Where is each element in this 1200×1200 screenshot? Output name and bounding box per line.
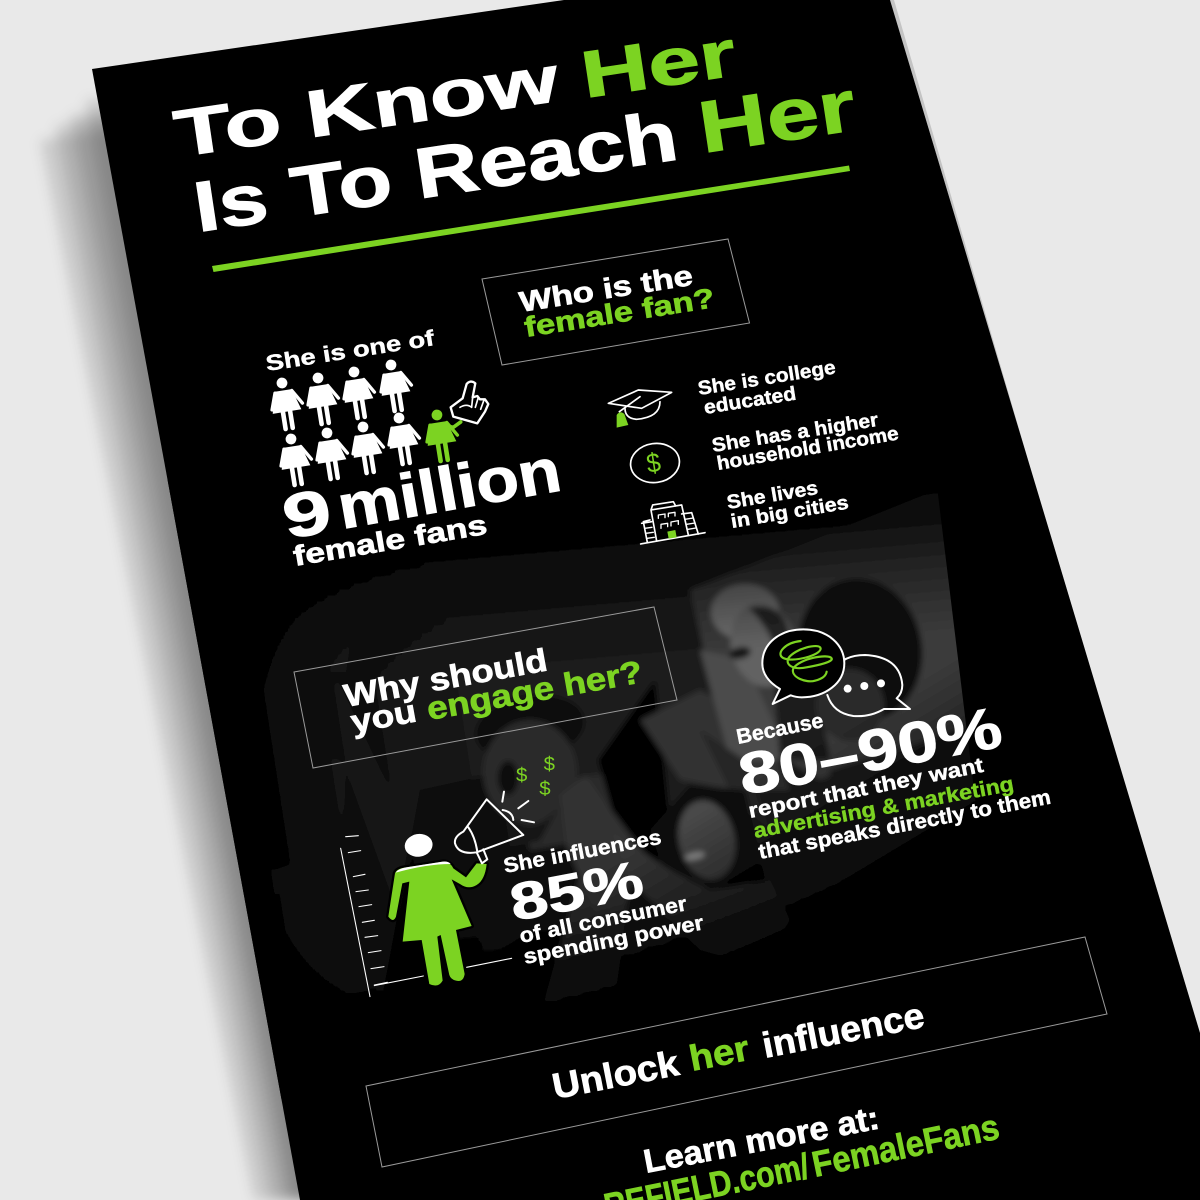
icon: graduation cap (608, 390, 672, 428)
icon: megaphone (455, 792, 534, 863)
text: she influences 85 percent: of all consumer (518, 892, 689, 948)
title: Her (693, 65, 861, 169)
poster drop shadow (40, 60, 600, 1200)
panel: unlock her influence (366, 937, 1107, 1167)
icon: dollar coin: $ (644, 447, 663, 479)
title: Her (576, 15, 740, 112)
dollar signs: $ (544, 755, 555, 776)
lower arm across (708, 740, 760, 820)
text: she influences 85 percent: She influences (502, 826, 663, 878)
woman figure (388, 832, 487, 986)
light backdrop top right (690, 480, 985, 780)
dollar signs: $ (516, 766, 528, 787)
text: big cities: in big cities (729, 492, 850, 533)
text: big cities (725, 477, 850, 533)
chart: influence scale with woman and megaphone (341, 755, 555, 997)
crowd photo background (168, 480, 976, 1100)
dollar signs: $ (539, 779, 551, 800)
text: college educated (696, 356, 837, 419)
panel: unlock her influence: Unlock (549, 1042, 683, 1107)
text: household income (710, 409, 900, 475)
lower woman (651, 786, 768, 888)
icon: green woman with foam finger (422, 381, 488, 463)
icon: speech bubbles with logo (762, 629, 910, 716)
panel: why should you engage her: Why should (341, 642, 550, 714)
text: she influences 85 percent (502, 826, 706, 969)
text: because 80-90 percent (733, 695, 1053, 864)
hand beside the man (562, 800, 634, 910)
text: college educated: educated (702, 383, 798, 419)
dark sleeve (598, 680, 675, 870)
text: big cities: She lives (725, 477, 820, 514)
text: because 80-90 percent: Because (735, 709, 825, 749)
panel: who is the female fan: female fan? (522, 282, 717, 343)
logo bubble (762, 629, 844, 704)
bright arm (640, 690, 790, 790)
text: she influences 85 percent: 85% (505, 851, 648, 933)
panel: why should you engage her: engage her? (424, 654, 645, 727)
dollar signs (516, 755, 555, 800)
text: college educated: She is college (696, 356, 837, 400)
text: because 80-90 percent: report that they want (747, 754, 985, 823)
text: 9 million (277, 436, 566, 553)
text: because 80-90 percent: 80–90% (733, 695, 1007, 808)
man in centre (524, 770, 666, 1001)
title: Is To Reach (189, 97, 683, 248)
text: web address (600, 1106, 1003, 1200)
panel: why should you engage her: you (348, 693, 419, 740)
text: she influences 85 percent: spending power (522, 911, 706, 969)
text: because 80-90 percent: advertising & marketing (752, 773, 1016, 843)
icon: city building (641, 502, 705, 544)
panel: who is the female fan (482, 239, 750, 365)
text: household income: household income (715, 423, 900, 475)
text: web address: FemaleFans (808, 1106, 1003, 1185)
title (169, 15, 861, 248)
text: she is one of: She is one of (264, 325, 437, 376)
text: because 80-90 percent: that speaks directly to them (757, 786, 1053, 864)
raised hands, left (272, 602, 414, 993)
scale axis (341, 836, 512, 997)
woman two (798, 577, 924, 718)
text: 9 million: 9 (277, 477, 337, 553)
text: 9 million: million (332, 436, 566, 543)
icon: dollar coin (628, 440, 682, 486)
panel: unlock her influence: influence (759, 994, 928, 1066)
title: To Know (169, 41, 564, 171)
icon: row of women (267, 357, 423, 487)
text: learn more at: Learn more at: (640, 1099, 882, 1180)
panel: unlock her influence: her (686, 1027, 752, 1079)
text: household income: She has a higher (710, 409, 880, 457)
woman one (711, 584, 779, 640)
poster right edge shadow (890, 0, 1200, 1050)
title underline (212, 166, 850, 272)
text: female fans: female fans (291, 509, 489, 572)
panel: who is the female fan: Who is the (517, 260, 695, 319)
reply bubble (827, 655, 910, 716)
panel: why should you engage her (294, 607, 677, 768)
